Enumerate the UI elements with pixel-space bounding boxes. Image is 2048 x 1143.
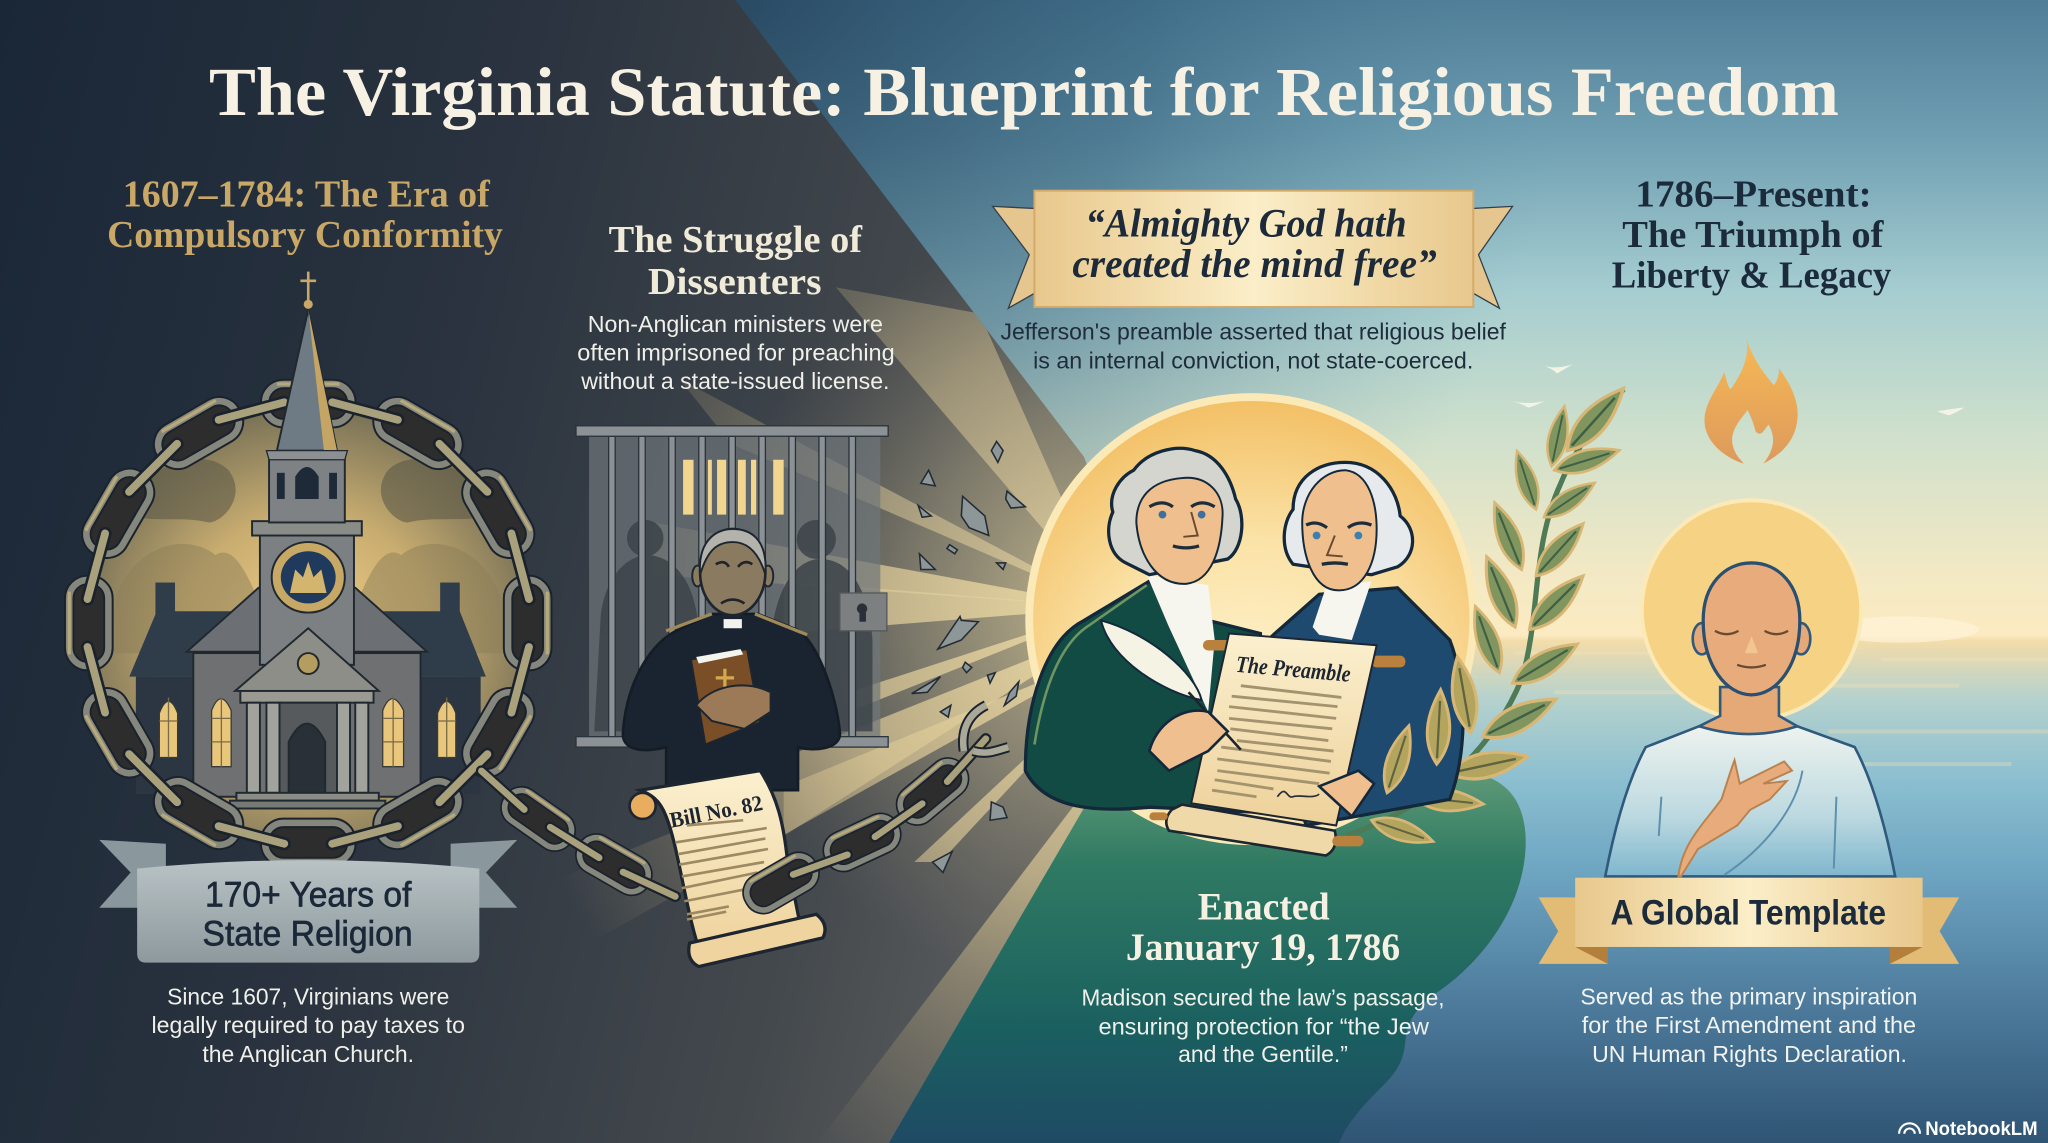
scroll: bill no. 82 xyxy=(630,771,825,967)
heading: triumph of liberty xyxy=(1612,173,1891,296)
jefferson face xyxy=(1136,478,1223,584)
text: imprisoned ministers: without a state-issued license. xyxy=(580,368,889,394)
illustration: church encircled by chain xyxy=(69,272,547,862)
church windows xyxy=(159,695,456,767)
chain: broken left section xyxy=(481,771,675,897)
illustration: jail cell xyxy=(576,426,888,747)
ribbon: 170+ years of state religion: 170+ Years of xyxy=(205,875,412,914)
shadow prisoners xyxy=(594,520,872,731)
text: global inspiration: Served as the primary inspiration xyxy=(1580,983,1917,1009)
neck xyxy=(1699,687,1797,734)
church scene backdrop xyxy=(93,408,524,839)
text: jefferson's preamble xyxy=(1000,319,1506,373)
ribbon: 170+ years of state religion: State Religion xyxy=(202,915,413,954)
heading: struggle of dissenters: Dissenters xyxy=(648,261,822,303)
padlock xyxy=(840,593,887,631)
text: global inspiration: for the First Amendment and the xyxy=(1582,1012,1916,1038)
heading: struggle of dissenters xyxy=(609,219,862,303)
text: global inspiration: UN Human Rights Declaration. xyxy=(1592,1041,1907,1067)
cell bars xyxy=(576,426,888,747)
banner: almighty god quote: created the mind free” xyxy=(1072,241,1437,286)
text: imprisoned ministers: often imprisoned for preaching xyxy=(577,339,895,365)
robe xyxy=(1605,726,1895,876)
halo xyxy=(1642,500,1861,720)
heading: era of compulsory conformity: Compulsory Conformity xyxy=(107,214,503,256)
text: madison secured passage: ensuring protection for “the Jew xyxy=(1098,1013,1430,1039)
heading: triumph of liberty: 1786–Present: xyxy=(1635,173,1872,215)
steeple and cross xyxy=(266,272,347,522)
royal seal xyxy=(272,542,345,613)
icon: quill and writing hand xyxy=(1101,620,1374,816)
scroll: bill no. 82: Bill No. 82 xyxy=(668,790,765,833)
icon: flame of liberty xyxy=(1704,338,1798,464)
background: dark oppression wedge xyxy=(0,0,1136,1143)
text: global inspiration xyxy=(1580,983,1917,1067)
jefferson coat xyxy=(1025,581,1260,812)
madison face xyxy=(1302,470,1377,590)
heading: triumph of liberty: The Triumph of xyxy=(1622,214,1884,256)
light rays radiating from the sun xyxy=(596,288,1086,1138)
illustration: thomas jefferson xyxy=(1025,448,1260,812)
title: The Virginia Statute: Blueprint for Religious Freedom xyxy=(209,53,1839,130)
heading: era of compulsory conformity xyxy=(107,173,503,256)
text: compulsory taxes: the Anglican Church. xyxy=(202,1041,414,1067)
hand over heart xyxy=(1678,760,1792,876)
madison hair xyxy=(1284,462,1413,575)
illustration: free person with halo xyxy=(1605,500,1895,876)
green hill xyxy=(888,771,1526,1143)
banner: almighty god quote xyxy=(993,191,1512,308)
notebooklm logo: NotebookLM xyxy=(1925,1118,2038,1140)
text: enacted date: January 19, 1786 xyxy=(1126,926,1400,969)
shattered chain fragments xyxy=(912,441,1025,872)
text: imprisoned ministers xyxy=(577,311,895,394)
head xyxy=(1703,563,1800,695)
jefferson hair xyxy=(1109,448,1242,575)
banner: almighty god quote: “Almighty God hath xyxy=(1085,200,1407,245)
heading: triumph of liberty: Liberty & Legacy xyxy=(1612,254,1891,296)
text: madison secured passage: and the Gentile.” xyxy=(1178,1041,1348,1067)
text: compulsory taxes: Since 1607, Virginians were xyxy=(167,983,449,1009)
text: enacted date xyxy=(1126,886,1400,969)
sun disc behind founders xyxy=(1029,397,1473,841)
scroll: the preamble xyxy=(1149,633,1405,856)
banner: a global template xyxy=(1539,878,1959,964)
olive leaves in front of figures xyxy=(1377,655,1482,796)
text: madison secured passage: Madison secured the law’s passage, xyxy=(1081,985,1445,1011)
illustration: olive branch xyxy=(1345,380,1633,851)
heading: era of compulsory conformity: 1607–1784: The Era of xyxy=(123,173,490,215)
ribbon: 170+ years of state religion xyxy=(99,840,517,963)
cell window light xyxy=(683,460,784,515)
text: madison secured passage xyxy=(1081,985,1445,1067)
heading: struggle of dissenters: The Struggle of xyxy=(609,219,862,261)
text: jefferson's preamble: is an internal conviction, not state-coerced. xyxy=(1033,347,1473,373)
text: enacted date: Enacted xyxy=(1198,886,1330,929)
banner: a global template: A Global Template xyxy=(1610,894,1886,933)
text: compulsory taxes xyxy=(152,983,465,1067)
birds xyxy=(1511,364,1964,415)
chain ring xyxy=(69,384,547,862)
illustration: james madison xyxy=(1254,462,1463,825)
text: compulsory taxes: legally required to pay taxes to xyxy=(152,1012,465,1038)
text: jefferson's preamble: Jefferson's preamble asserted that religious belief xyxy=(1000,319,1506,345)
church body xyxy=(187,521,427,808)
illustration: imprisoned minister with bible xyxy=(623,529,840,790)
text: imprisoned ministers: Non-Anglican ministers were xyxy=(588,311,883,337)
madison coat xyxy=(1254,588,1463,825)
side wings xyxy=(129,583,486,794)
scroll: the preamble: The Preamble xyxy=(1235,652,1352,688)
ears xyxy=(1693,623,1711,654)
chain: right section breaking apart xyxy=(741,705,1008,916)
